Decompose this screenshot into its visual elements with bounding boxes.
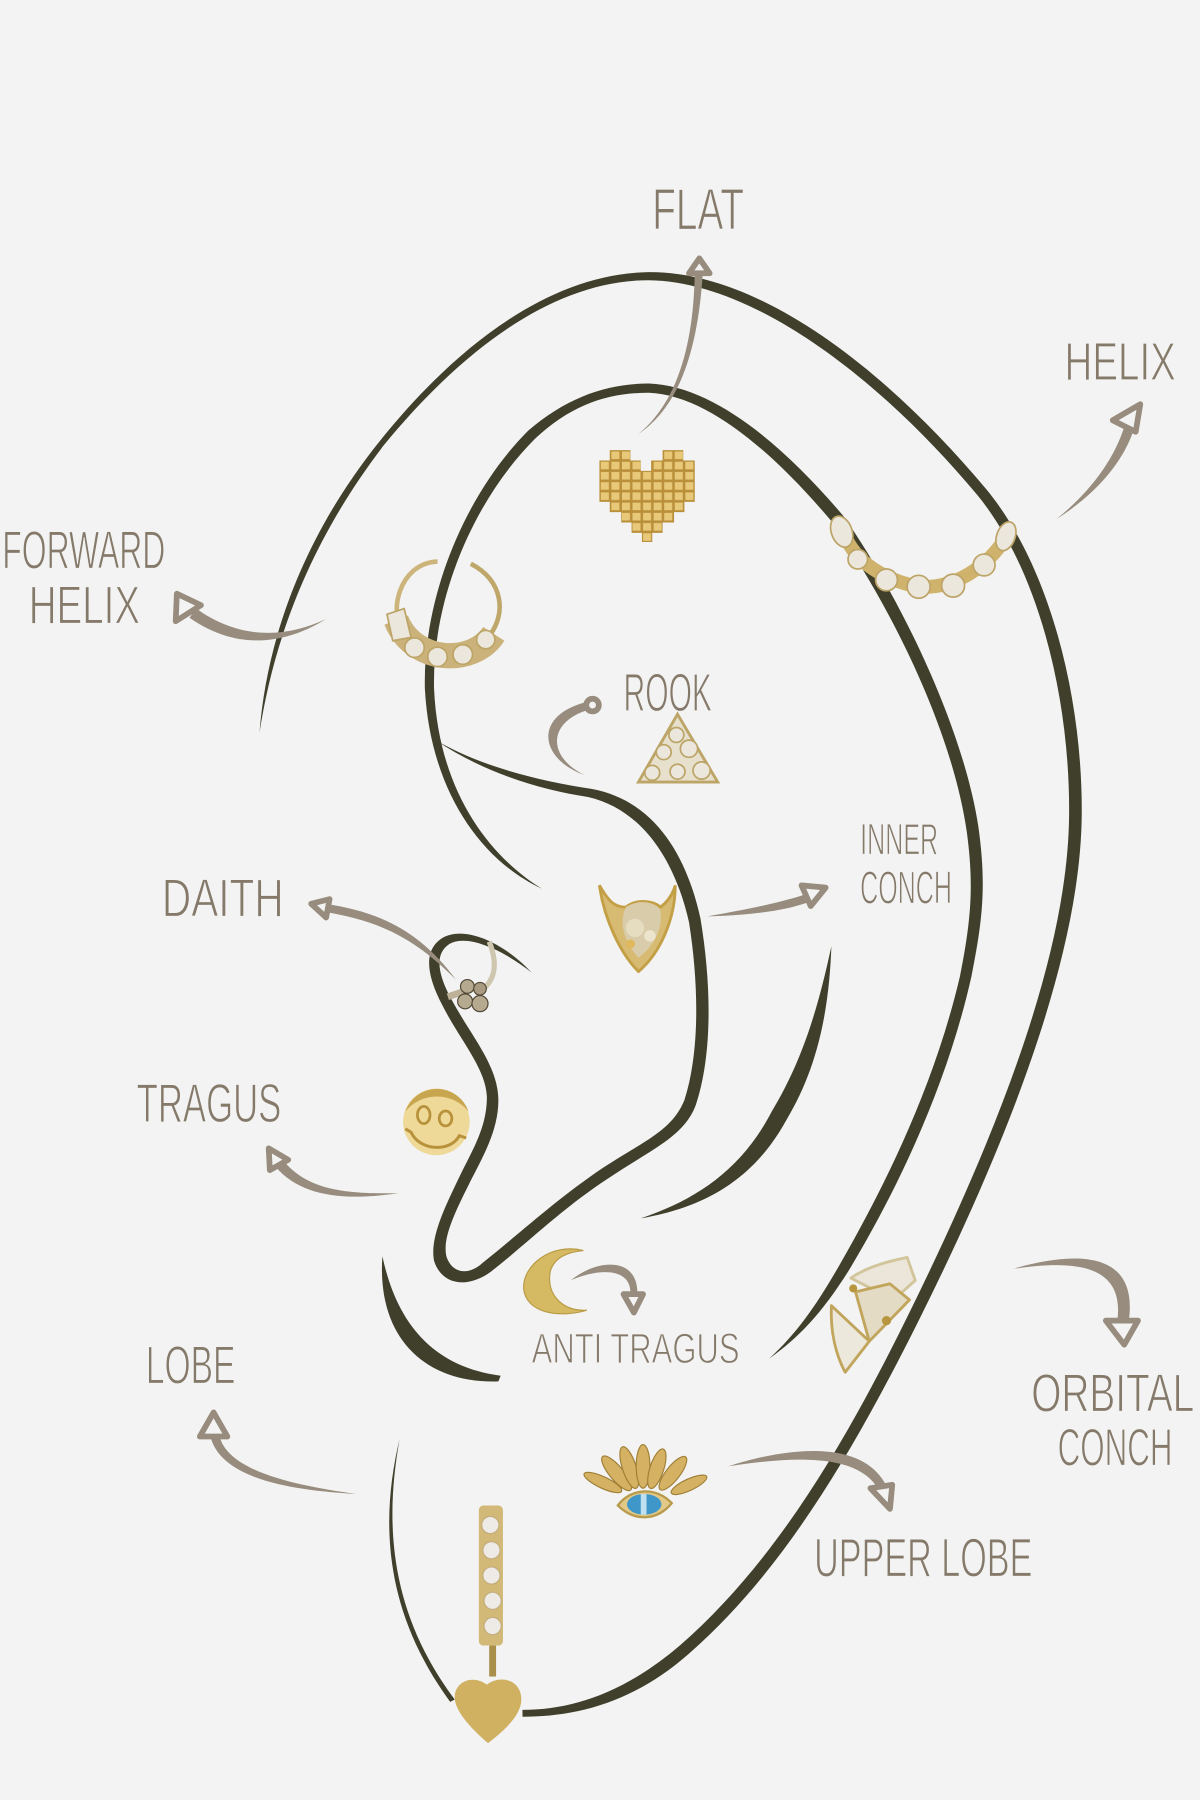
antihelix crease (641, 946, 831, 1218)
label: tragus: TRAGUS (137, 1072, 281, 1134)
earlobe upper crease (382, 1256, 501, 1382)
label: flat: FLAT (652, 178, 744, 243)
jewelry: upper lobe evil eye stud (582, 1445, 709, 1517)
jewelry: daith ring with bead cluster (448, 942, 494, 1012)
jewelry: inner conch shield stud (599, 885, 675, 971)
label: upper lobe (728, 1451, 1032, 1589)
label: forward helix (2, 520, 326, 640)
label: inner conch (707, 814, 952, 916)
earlobe left line (389, 1439, 455, 1702)
label: lobe: LOBE (146, 1336, 235, 1396)
jewelry: forward helix clicker ring (387, 562, 500, 667)
label: helix (1056, 332, 1176, 519)
label: forward helix: HELIX (29, 576, 140, 636)
label: flat (638, 178, 744, 434)
label: upper lobe: UPPER LOBE (814, 1527, 1032, 1589)
label: rook (548, 663, 712, 775)
label: orbital conch (1013, 1258, 1194, 1477)
label: tragus (137, 1072, 398, 1197)
label: daith (162, 868, 456, 980)
jewelry: pixel heart stud (599, 450, 695, 542)
outer helix curve (260, 272, 1082, 1717)
label: lobe (146, 1336, 356, 1494)
label: daith: DAITH (162, 868, 284, 928)
jewelry: lobe pave bar with heart charm (455, 1505, 521, 1743)
jewelry: anti tragus crescent moon (524, 1249, 587, 1314)
label: anti tragus: ANTI TRAGUS (532, 1326, 740, 1373)
label: forward helix: FORWARD (2, 520, 165, 580)
label: inner conch: INNER (860, 814, 938, 864)
ear outline (260, 272, 1082, 1717)
label: inner conch: CONCH (860, 862, 952, 914)
jewelry: rook pave triangle (638, 714, 718, 782)
inner helix curve (425, 384, 983, 1358)
conch and tragus curve (429, 741, 709, 1282)
jewelry: orbital triple stone cluster (831, 1257, 915, 1372)
label: rook: ROOK (624, 663, 712, 723)
jewelry: tragus smiley stud (403, 1089, 470, 1155)
label: anti tragus (532, 1265, 740, 1373)
jewelry: helix curved stone bar (827, 513, 1020, 598)
